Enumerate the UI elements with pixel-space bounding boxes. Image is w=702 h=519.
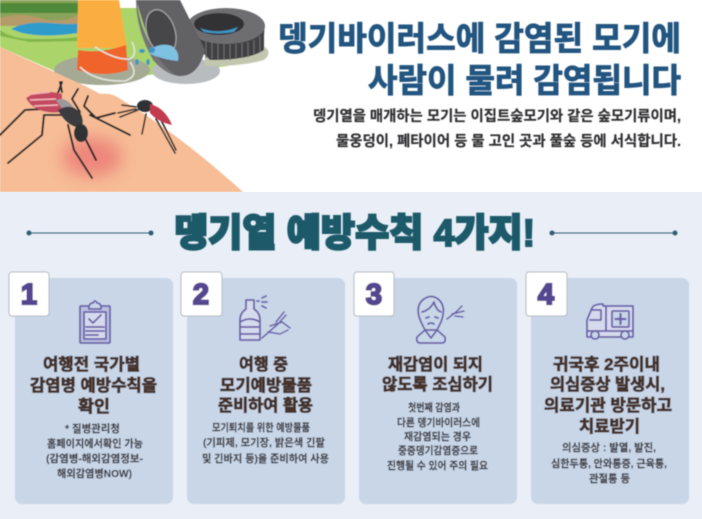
panel: step 1: 확인 xyxy=(78,397,110,416)
panel: step 3: 다른 뎅기바이러스에 xyxy=(397,416,480,429)
panel: step 4: 관절통 등 xyxy=(589,472,630,485)
skin surface xyxy=(0,47,243,192)
panel: step 3: 첫번째 감염과 xyxy=(408,401,460,414)
panel: step 2: 2 xyxy=(193,279,209,311)
panel: step 3: 진행될 수 있어 주의 필요 xyxy=(387,459,488,472)
panel: step 3: 중증뎅기감염증으로 xyxy=(398,444,478,457)
icon: sick woman and mosquito xyxy=(417,296,464,343)
ground shadows xyxy=(54,55,150,85)
panel: prevention background xyxy=(0,192,702,519)
title: 뎅기바이러스에 감염된 모기에 xyxy=(278,20,681,57)
panel: step 1: 감염병 예방수칙을 xyxy=(30,376,157,395)
title: 사람이 물려 감염됩니다 xyxy=(368,62,681,99)
panel: step 2: 여행 중 xyxy=(239,354,288,374)
intro text: 뎅기열을 매개하는 모기는 이집트숲모기와 같은 숲모기류이며, xyxy=(313,108,681,125)
illustration: mosquito biting skin with breeding sites xyxy=(0,0,269,192)
title xyxy=(278,20,681,99)
icon: ambulance xyxy=(587,304,633,339)
panel: step 2: 모기퇴치를 위한 예방물품 xyxy=(212,421,310,434)
section heading xyxy=(27,213,677,255)
water drops xyxy=(135,47,155,65)
panel: step 1 xyxy=(9,272,173,504)
panel: step 1: 여행전 국가별 xyxy=(43,354,140,374)
panel: step 4: 귀국후 2주이내 xyxy=(553,355,660,374)
panel: step 2: 및 긴바지 등)을 준비하여 사용 xyxy=(202,452,329,465)
panel: step 3 xyxy=(354,272,517,504)
panel: step 2: (기피제, 모기장, 밝은색 긴팔 xyxy=(203,436,325,449)
panel: step 2: 준비하여 활용 xyxy=(218,396,313,415)
large mosquito xyxy=(0,82,130,178)
lying tire xyxy=(187,8,265,60)
intro text xyxy=(313,108,681,150)
panel: step 1: 1 xyxy=(21,279,37,311)
section heading: 뎅기열 예방수칙 4가지! xyxy=(174,213,535,255)
panel: step 4: 의심증상 발생시, xyxy=(550,375,665,394)
panel: step 4: 심한두통, 안와통증, 근육통, xyxy=(551,457,667,470)
icon: clipboard xyxy=(80,301,110,343)
panel: step 4: 치료받기 xyxy=(579,417,640,436)
panel: step 4: 의심증상 : 발열, 발진, xyxy=(562,441,656,454)
green ground xyxy=(0,0,228,80)
bite redness xyxy=(62,137,122,177)
small mosquito xyxy=(118,100,176,153)
panel: step 3: 3 xyxy=(366,279,382,311)
panel: step 3: 재감염되는 경우 xyxy=(404,430,471,443)
intro text: 물웅덩이, 폐타이어 등 물 고인 곳과 풀숲 등에 서식합니다. xyxy=(336,133,681,150)
standing tire with water xyxy=(136,0,205,76)
orange traffic cone xyxy=(77,0,135,81)
panel: step 4: 4 xyxy=(538,279,554,311)
panel: step 1: 해외감염병NOW) xyxy=(57,467,132,480)
panel: step 4 xyxy=(526,272,689,504)
panel: step 1: * 질병관리청 xyxy=(65,422,120,435)
panel: step 2 xyxy=(181,272,345,504)
panel: step 3: 않도록 조심하기 xyxy=(382,375,493,394)
panel: step 2: 모기예방물품 xyxy=(220,376,312,395)
panel: step 1: (감염병-해외감염정보- xyxy=(46,452,143,465)
icon: repellent spray and mosquito xyxy=(240,296,290,340)
garden and pond xyxy=(0,0,78,42)
panel: step 1: 홈페이지에서확인 가능 xyxy=(47,437,143,450)
panel: step 3: 재감염이 되지 xyxy=(388,355,483,374)
panel: step 4: 의료기관 방문하고 xyxy=(544,396,672,415)
